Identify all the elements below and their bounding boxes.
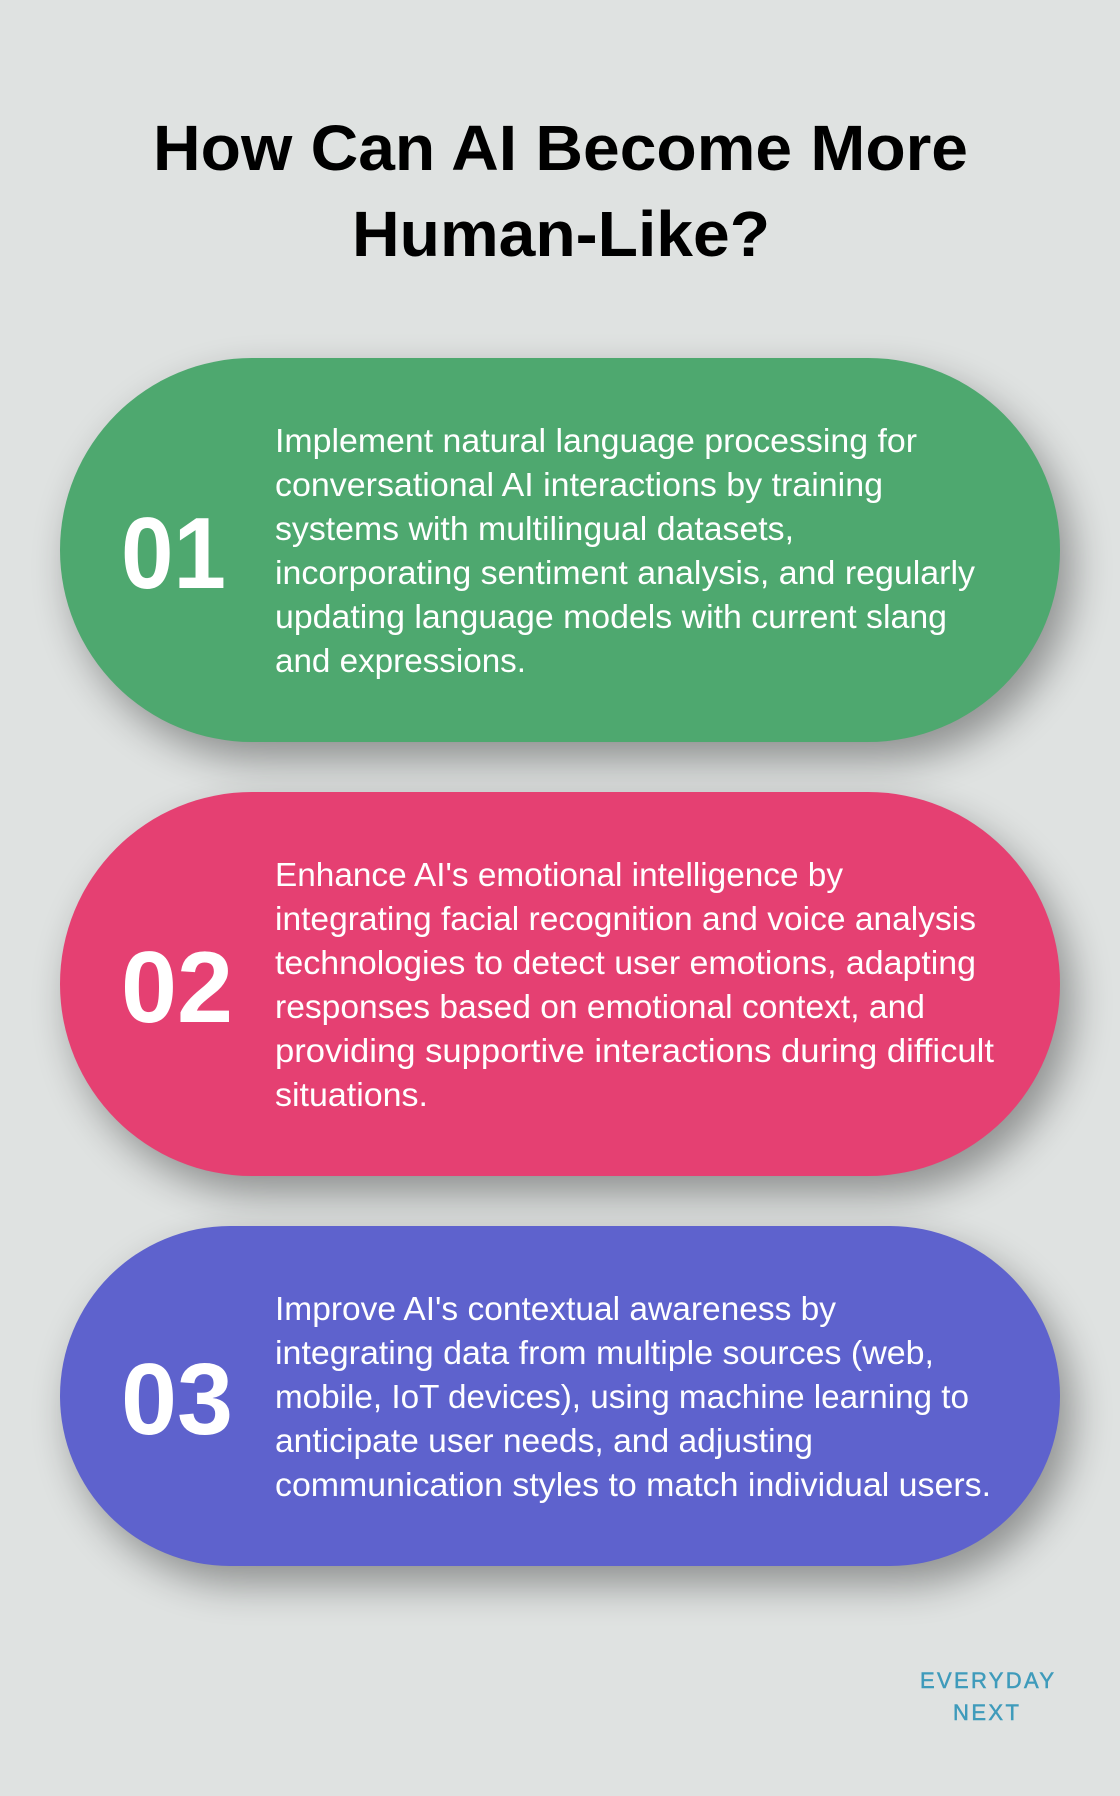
text: step 02 description: responses based on emotional context, and — [275, 989, 925, 1026]
text: step 03 description — [275, 1291, 991, 1504]
text: step 01 description — [275, 423, 975, 680]
text: step 01 description: and expressions. — [275, 643, 526, 680]
panel: step 02 — [60, 792, 1072, 1194]
number 01: 01 — [121, 498, 226, 610]
title — [153, 112, 968, 270]
text: step 01 description: incorporating sentiment analysis, and regularly — [275, 555, 975, 592]
title: Human-Like? — [352, 198, 770, 270]
logo: Everyday Next: NEXT — [953, 1700, 1019, 1725]
text: step 01 description: systems with multilingual datasets, — [275, 511, 794, 548]
logo: Everyday Next — [920, 1668, 1054, 1725]
text: step 01 description: Implement natural language processing for — [275, 423, 917, 460]
text: step 03 description: anticipate user needs, and adjusting — [275, 1423, 813, 1460]
text: step 03 description: communication styles to match individual users. — [275, 1467, 991, 1504]
number 02: 02 — [121, 932, 233, 1044]
text: step 02 description: providing supportive interactions during difficult — [275, 1033, 995, 1070]
text: step 02 description: technologies to detect user emotions, adapting — [275, 945, 976, 982]
title: How Can AI Become More — [153, 112, 968, 184]
logo: Everyday Next: EVERYDAY — [920, 1668, 1054, 1693]
text: step 02 description: Enhance AI's emotional intelligence by — [275, 857, 843, 894]
panel: step 01 — [60, 358, 1072, 760]
text: step 02 description: integrating facial recognition and voice analysis — [275, 901, 976, 938]
text: step 03 description: Improve AI's contextual awareness by — [275, 1291, 836, 1328]
text: step 03 description: integrating data from multiple sources (web, — [275, 1335, 934, 1372]
text: step 03 description: mobile, IoT devices), using machine learning to — [275, 1379, 969, 1416]
text: step 02 description — [275, 857, 995, 1114]
text: step 02 description: situations. — [275, 1077, 428, 1114]
text: step 01 description: conversational AI interactions by training — [275, 467, 883, 504]
panel: step 03 — [60, 1226, 1072, 1584]
text: step 01 description: updating language models with current slang — [275, 599, 947, 636]
number 03: 03 — [121, 1344, 233, 1456]
